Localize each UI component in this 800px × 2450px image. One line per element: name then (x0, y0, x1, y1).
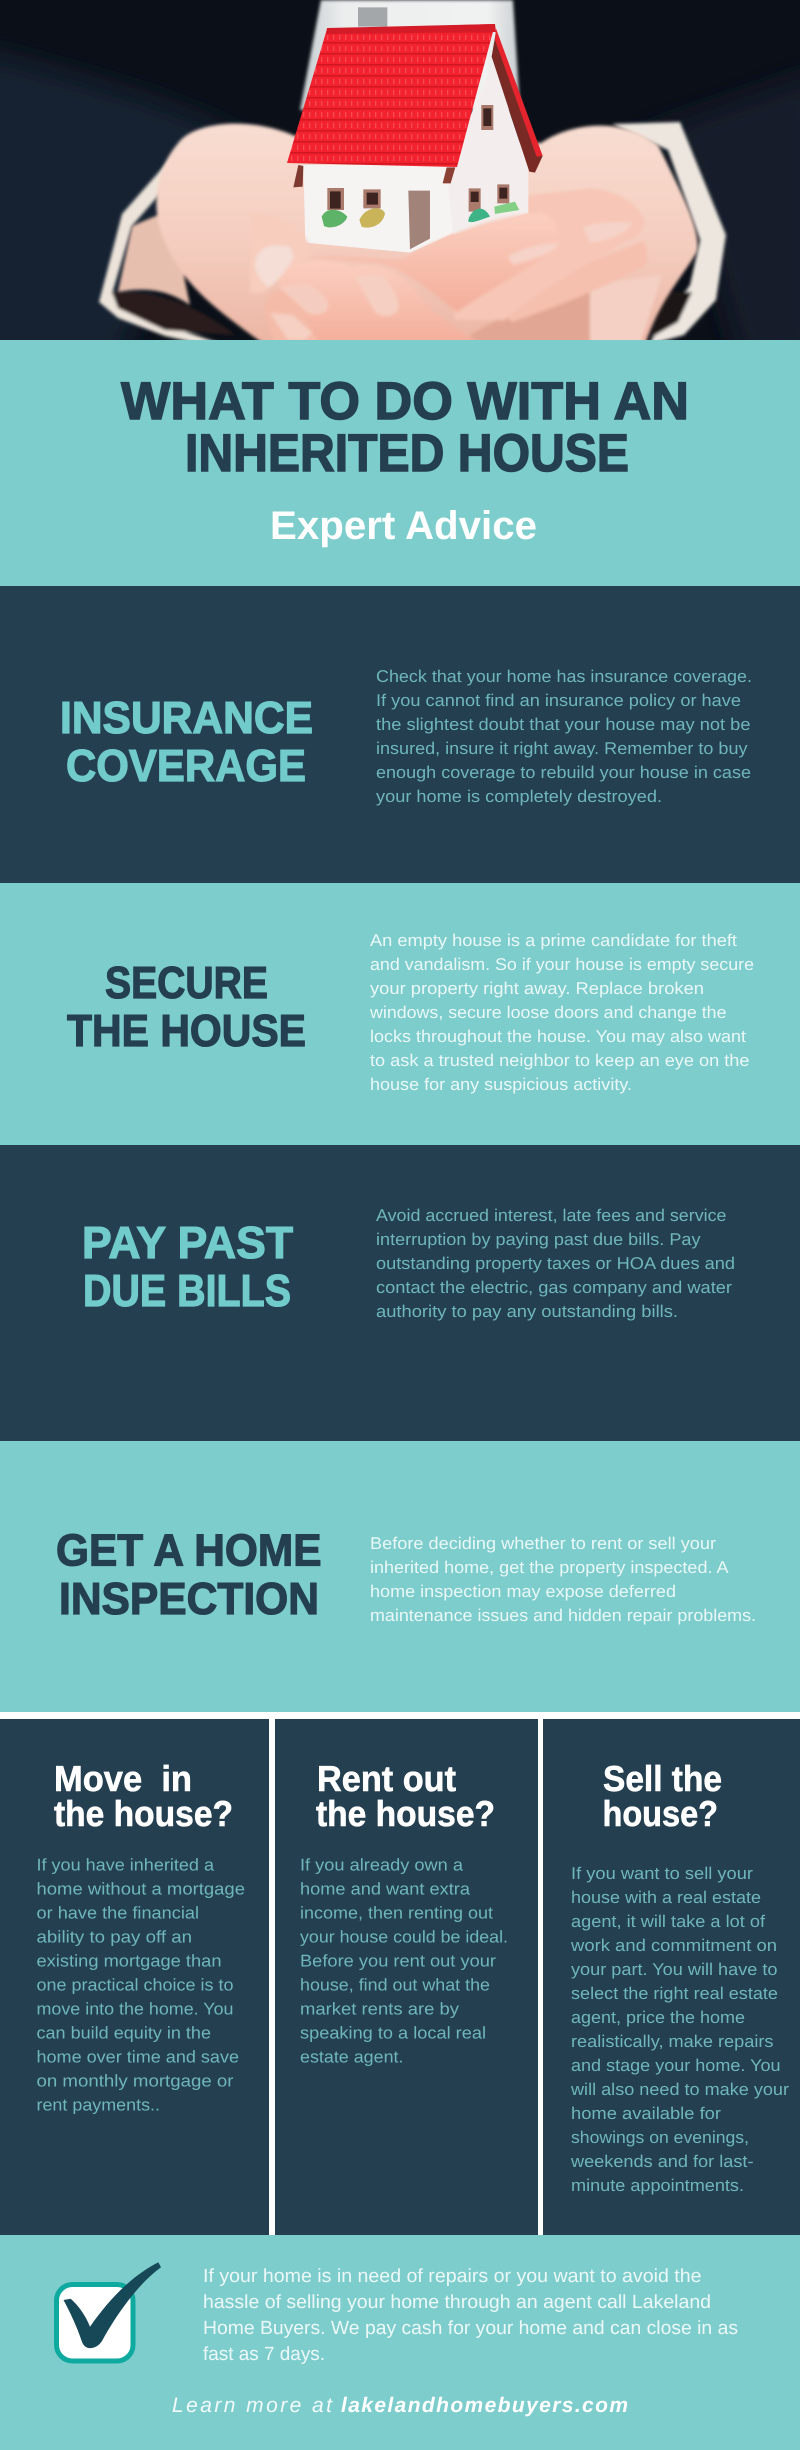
heading: INSURANCE (60, 692, 313, 743)
body text: home available for (571, 2104, 721, 2123)
right hand lower fingers (589, 276, 660, 340)
body text: locks throughout the house. You may also want (370, 1027, 746, 1046)
heading: GET A HOME (56, 1524, 322, 1576)
heading: COVERAGE (66, 740, 306, 791)
body text: existing mortgage than (36, 1952, 222, 1970)
body text: move into the home. You (36, 2000, 234, 2018)
call to action text: hassle of selling your home through an agent call Lakeland (203, 2292, 711, 2313)
body text (376, 667, 752, 806)
body text: If you have inherited a (36, 1856, 215, 1874)
body text: contact the electric, gas company and water (376, 1278, 732, 1297)
house walls (303, 165, 453, 253)
body text: select the right real estate (571, 1984, 778, 2003)
footer panel (0, 2235, 800, 2450)
body text (36, 1856, 245, 2114)
body text: minute appointments. (571, 2176, 744, 2195)
column: move in the house (36, 1758, 245, 2114)
eaves (293, 165, 303, 187)
body text: ability to pay off an (36, 1928, 192, 1946)
body text: Avoid accrued interest, late fees and service (376, 1206, 726, 1225)
heading (60, 692, 313, 791)
body text: agent, it will take a lot of (571, 1912, 765, 1931)
body text: house, find out what the (300, 1976, 490, 1994)
body text: insured, insure it right away. Remember to buy (376, 739, 748, 758)
hands base (118, 124, 698, 345)
body text: interruption by paying past due bills. Pay (376, 1230, 701, 1249)
heading: SECURE (105, 957, 268, 1008)
flower boxes (322, 210, 347, 227)
body text (370, 1534, 756, 1625)
title: INHERITED HOUSE (185, 424, 629, 483)
body text: to ask a trusted neighbor to keep an eye on the (370, 1051, 750, 1070)
body text: If you cannot find an insurance policy or have (376, 691, 741, 710)
subtitle: Expert Advice (270, 504, 537, 548)
heading (56, 1524, 322, 1624)
heading: Sell the (603, 1758, 722, 1799)
body text: windows, secure loose doors and change the (369, 1003, 726, 1022)
heading: the house? (316, 1793, 495, 1834)
body text: and vandalism. So if your house is empty secure (370, 955, 754, 974)
panel: get a home inspection (0, 1441, 800, 1712)
heading: Rent out (317, 1758, 456, 1799)
body text: realistically, make repairs (571, 2032, 774, 2051)
body text: house with a real estate (571, 1888, 761, 1907)
body text: your house could be ideal. (300, 1928, 508, 1946)
call to action text (203, 2266, 738, 2365)
heading (54, 1758, 233, 1834)
body text (300, 1856, 508, 2066)
body text: your part. You will have to (571, 1960, 778, 1979)
body text: authority to pay any outstanding bills. (376, 1302, 678, 1321)
body text: on monthly mortgage or (36, 2072, 234, 2090)
body text: home over time and save (36, 2048, 239, 2066)
body text: and stage your home. You (571, 2056, 780, 2075)
options section background (0, 1712, 800, 2235)
column: rent out the house (300, 1758, 508, 2066)
body text (376, 1206, 735, 1321)
body text: can build equity in the (36, 2024, 211, 2042)
panel: secure the house (0, 883, 800, 1145)
hero photo: hands holding a model house (0, 0, 800, 360)
website link line: Learn more at (172, 2394, 333, 2417)
heading (67, 957, 306, 1056)
body text: Before you rent out your (300, 1952, 496, 1970)
body text: house for any suspicious activity. (370, 1075, 632, 1094)
heading: house? (602, 1793, 718, 1834)
body text: will also need to make your (570, 2080, 789, 2099)
house (293, 7, 543, 253)
body text: home without a mortgage (36, 1880, 245, 1898)
heading: INSPECTION (59, 1573, 319, 1624)
panel: insurance coverage (0, 586, 800, 883)
title: WHAT TO DO WITH AN (121, 372, 689, 431)
call to action text: Home Buyers. We pay cash for your home and can close in as (203, 2318, 738, 2339)
title panel (0, 340, 800, 586)
white shirt (300, 0, 520, 110)
body text: estate agent. (300, 2048, 404, 2066)
body text: inherited home, get the property inspected. A (370, 1558, 729, 1577)
heading: the house? (54, 1793, 233, 1834)
windows and door (327, 105, 509, 212)
heading (82, 1217, 293, 1316)
front fingers (250, 213, 632, 345)
icon: checkbox with check mark (56, 2262, 161, 2361)
red tiled roof (287, 24, 496, 167)
body text: enough coverage to rebuild your house in case (376, 763, 751, 782)
title (121, 372, 689, 483)
body text: An empty house is a prime candidate for theft (370, 931, 737, 950)
body text: or have the financial (36, 1904, 199, 1922)
heading: THE HOUSE (67, 1005, 306, 1056)
call to action text: If your home is in need of repairs or you want to avoid the (203, 2266, 702, 2287)
roof side edge (492, 32, 543, 173)
body text (570, 1864, 789, 2195)
body text: agent, price the home (571, 2008, 745, 2027)
body text: income, then renting out (300, 1904, 493, 1922)
heading: Move in (54, 1758, 192, 1799)
shirt cuffs (99, 122, 726, 345)
chimney (358, 7, 387, 27)
body text: weekends and for last- (570, 2152, 754, 2171)
body text: If you already own a (300, 1856, 464, 1874)
body text: one practical choice is to (36, 1976, 234, 1994)
body text: Check that your home has insurance coverage. (376, 667, 752, 686)
body text: If you want to sell your (571, 1864, 753, 1883)
column: sell the house (570, 1758, 789, 2195)
website link line: lakelandhomebuyers.com (341, 2394, 628, 2417)
website link line (172, 2394, 628, 2417)
body text: market rents are by (300, 2000, 460, 2018)
body text: showings on evenings, (571, 2128, 749, 2147)
body text: home and want extra (300, 1880, 471, 1898)
body text: Before deciding whether to rent or sell your (370, 1534, 716, 1553)
body text: home inspection may expose deferred (370, 1582, 676, 1601)
call to action text: fast as 7 days. (203, 2344, 325, 2365)
body text (369, 931, 754, 1094)
body text: outstanding property taxes or HOA dues and (376, 1254, 735, 1273)
body text: work and commitment on (570, 1936, 777, 1955)
body text: the slightest doubt that your house may not be (376, 715, 750, 734)
body text: your home is completely destroyed. (376, 787, 662, 806)
heading (602, 1758, 722, 1834)
heading (316, 1758, 495, 1834)
body text: rent payments.. (36, 2096, 160, 2114)
heading: PAY PAST (82, 1217, 293, 1268)
body text: maintenance issues and hidden repair problems. (370, 1606, 756, 1625)
body text: your property right away. Replace broken (370, 979, 704, 998)
dark jacket sleeves (0, 50, 800, 360)
body text: speaking to a local real (300, 2024, 486, 2042)
fingernails (255, 245, 294, 287)
heading: DUE BILLS (83, 1265, 291, 1316)
panel: pay past due bills (0, 1145, 800, 1441)
